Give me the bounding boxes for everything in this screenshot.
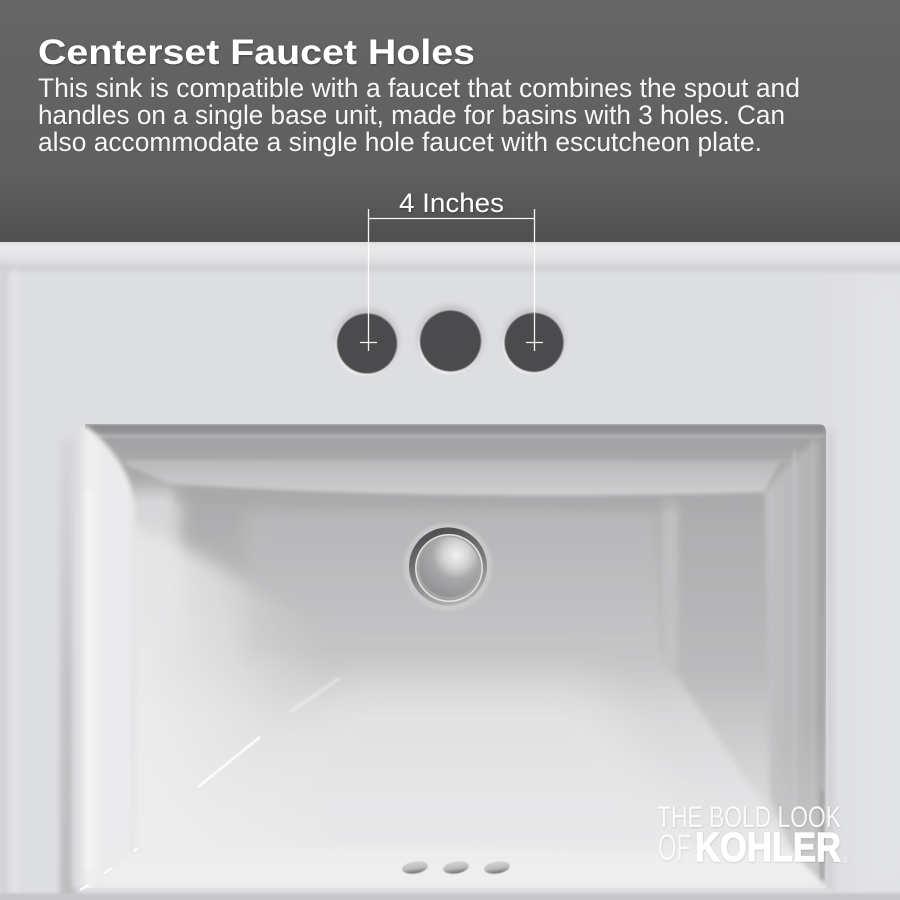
hole centre — [420, 310, 481, 372]
sink deck — [0, 242, 900, 900]
title: Centerset Faucet Holes — [38, 32, 475, 72]
bowl floor — [332, 684, 592, 733]
deck shadow left of basin — [60, 440, 76, 900]
basin bowl — [72, 424, 832, 894]
back rim band — [0, 244, 900, 272]
hole left — [337, 314, 397, 374]
drain halo — [404, 523, 492, 611]
hole right — [504, 313, 564, 372]
overflow holes — [402, 861, 510, 874]
rear lip — [120, 462, 780, 496]
glints — [80, 678, 340, 890]
bowl rear panel — [252, 518, 653, 550]
rear molding — [85, 424, 826, 434]
hole shadows — [334, 304, 566, 362]
description: handles on a single base unit, made for basins with 3 holes. Can — [38, 100, 785, 130]
brand logo: KOHLER — [695, 824, 841, 870]
drain cap — [419, 537, 479, 597]
brand logo: ® — [842, 855, 849, 865]
sink photo — [0, 242, 900, 900]
left molding — [72, 426, 136, 888]
description: This sink is compatible with a faucet that combines the spout and — [38, 73, 800, 103]
drain ring — [409, 528, 487, 606]
drain — [404, 523, 492, 611]
deck shadow right of basin — [828, 432, 833, 888]
description — [38, 73, 800, 157]
front lip — [792, 854, 822, 883]
right dark streak — [820, 790, 824, 880]
description: also accommodate a single hole faucet with escutcheon plate. — [38, 127, 762, 157]
brand logo — [657, 801, 849, 870]
dimension label: 4 Inches — [399, 188, 504, 218]
bowl left wall light — [134, 531, 291, 810]
brand logo: THE BOLD LOOK — [657, 801, 841, 834]
dark background panel — [0, 0, 900, 242]
bowl right shading — [676, 602, 769, 798]
dimension bracket — [360, 209, 543, 351]
hole highlights — [335, 327, 551, 376]
brand logo: OF — [658, 827, 691, 868]
faucet holes — [335, 305, 565, 376]
bowl left upper light — [132, 483, 187, 552]
basin — [72, 424, 832, 894]
bottom edge shade — [0, 893, 900, 900]
right inner molding — [765, 432, 826, 888]
